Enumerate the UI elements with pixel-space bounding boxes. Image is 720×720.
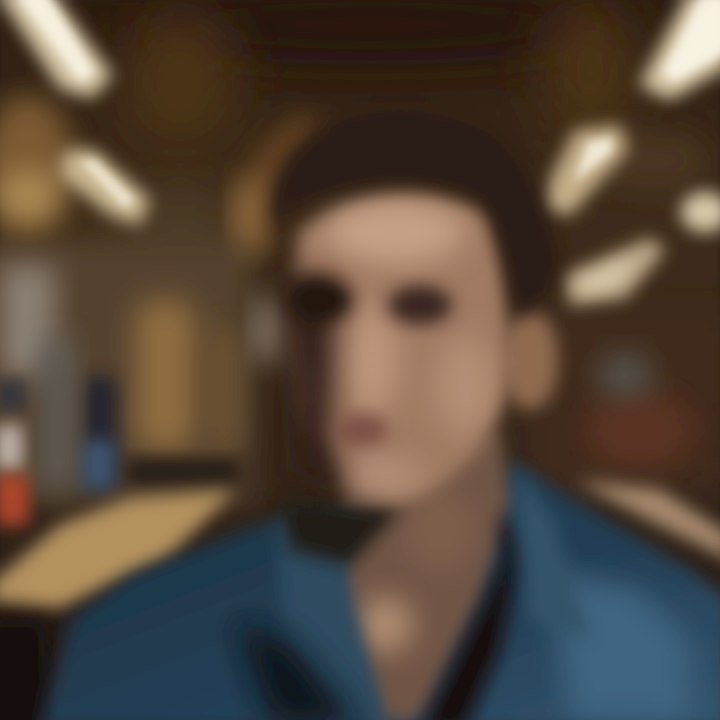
neck (340, 430, 510, 720)
face (294, 196, 508, 500)
eye right (388, 285, 452, 325)
left shelves (0, 95, 285, 500)
right shelves (530, 310, 720, 560)
light: top right (640, 0, 720, 100)
forehead highlight (325, 200, 465, 264)
ceiling lights (0, 0, 720, 305)
ear (502, 310, 558, 410)
red object (0, 475, 28, 525)
face shadow left (280, 270, 345, 490)
collar right (515, 465, 590, 640)
collar left (275, 515, 385, 720)
eye left (288, 278, 352, 322)
collar shadow left (280, 500, 400, 565)
mouth (336, 414, 388, 446)
light: far right (681, 192, 720, 232)
light: lower right (565, 238, 665, 305)
shirt (40, 460, 720, 720)
light: middle right (545, 125, 628, 215)
cheek highlight (435, 335, 495, 435)
shirt dark fold (235, 620, 360, 720)
collar black placket (420, 510, 520, 720)
light: top left (0, 0, 112, 98)
lower left dark floor (0, 620, 45, 720)
hair (271, 109, 560, 318)
shirt highlight (550, 570, 690, 720)
table (0, 490, 235, 608)
light: middle left (60, 150, 150, 225)
